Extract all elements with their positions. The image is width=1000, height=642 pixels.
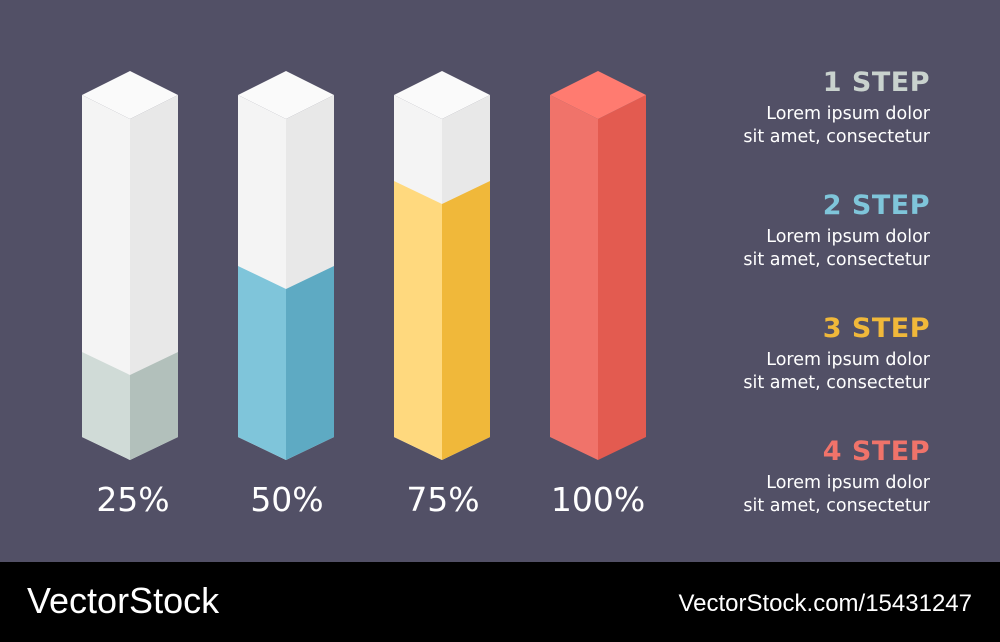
step 3 text: 3 STEP	[823, 313, 930, 344]
step 4 text	[743, 436, 930, 516]
step 4 text: sit amet, consectetur	[743, 496, 930, 516]
step 2 text: Lorem ipsum dolor	[766, 227, 930, 247]
percentage labels: 75%	[406, 480, 480, 519]
percentage labels: 50%	[250, 480, 324, 519]
step 2 text: sit amet, consectetur	[743, 250, 930, 270]
percentage labels: 100%	[551, 480, 645, 519]
step 1 text	[743, 67, 930, 147]
bar 2: 50%	[238, 71, 334, 460]
percentage labels	[96, 480, 645, 519]
step 2 text	[743, 190, 930, 270]
bar 3: 75%	[394, 71, 490, 460]
step 3 text: Lorem ipsum dolor	[766, 350, 930, 370]
step 2 text: 2 STEP	[823, 190, 930, 221]
footer watermark bar	[0, 562, 1000, 642]
step 4 text: 4 STEP	[823, 436, 930, 467]
step 1 text: Lorem ipsum dolor	[766, 104, 930, 124]
percentage labels: 25%	[96, 480, 170, 519]
step 3 text: sit amet, consectetur	[743, 373, 930, 393]
bar 4: 100%	[550, 71, 646, 460]
step 4 text: Lorem ipsum dolor	[766, 473, 930, 493]
footer logo text: VectorStock	[27, 580, 219, 621]
step 1 text: 1 STEP	[823, 67, 930, 98]
footer url text: VectorStock.com/15431247	[678, 590, 972, 617]
bar 1: 25%	[82, 71, 178, 460]
step 3 text	[743, 313, 930, 393]
step 1 text: sit amet, consectetur	[743, 127, 930, 147]
